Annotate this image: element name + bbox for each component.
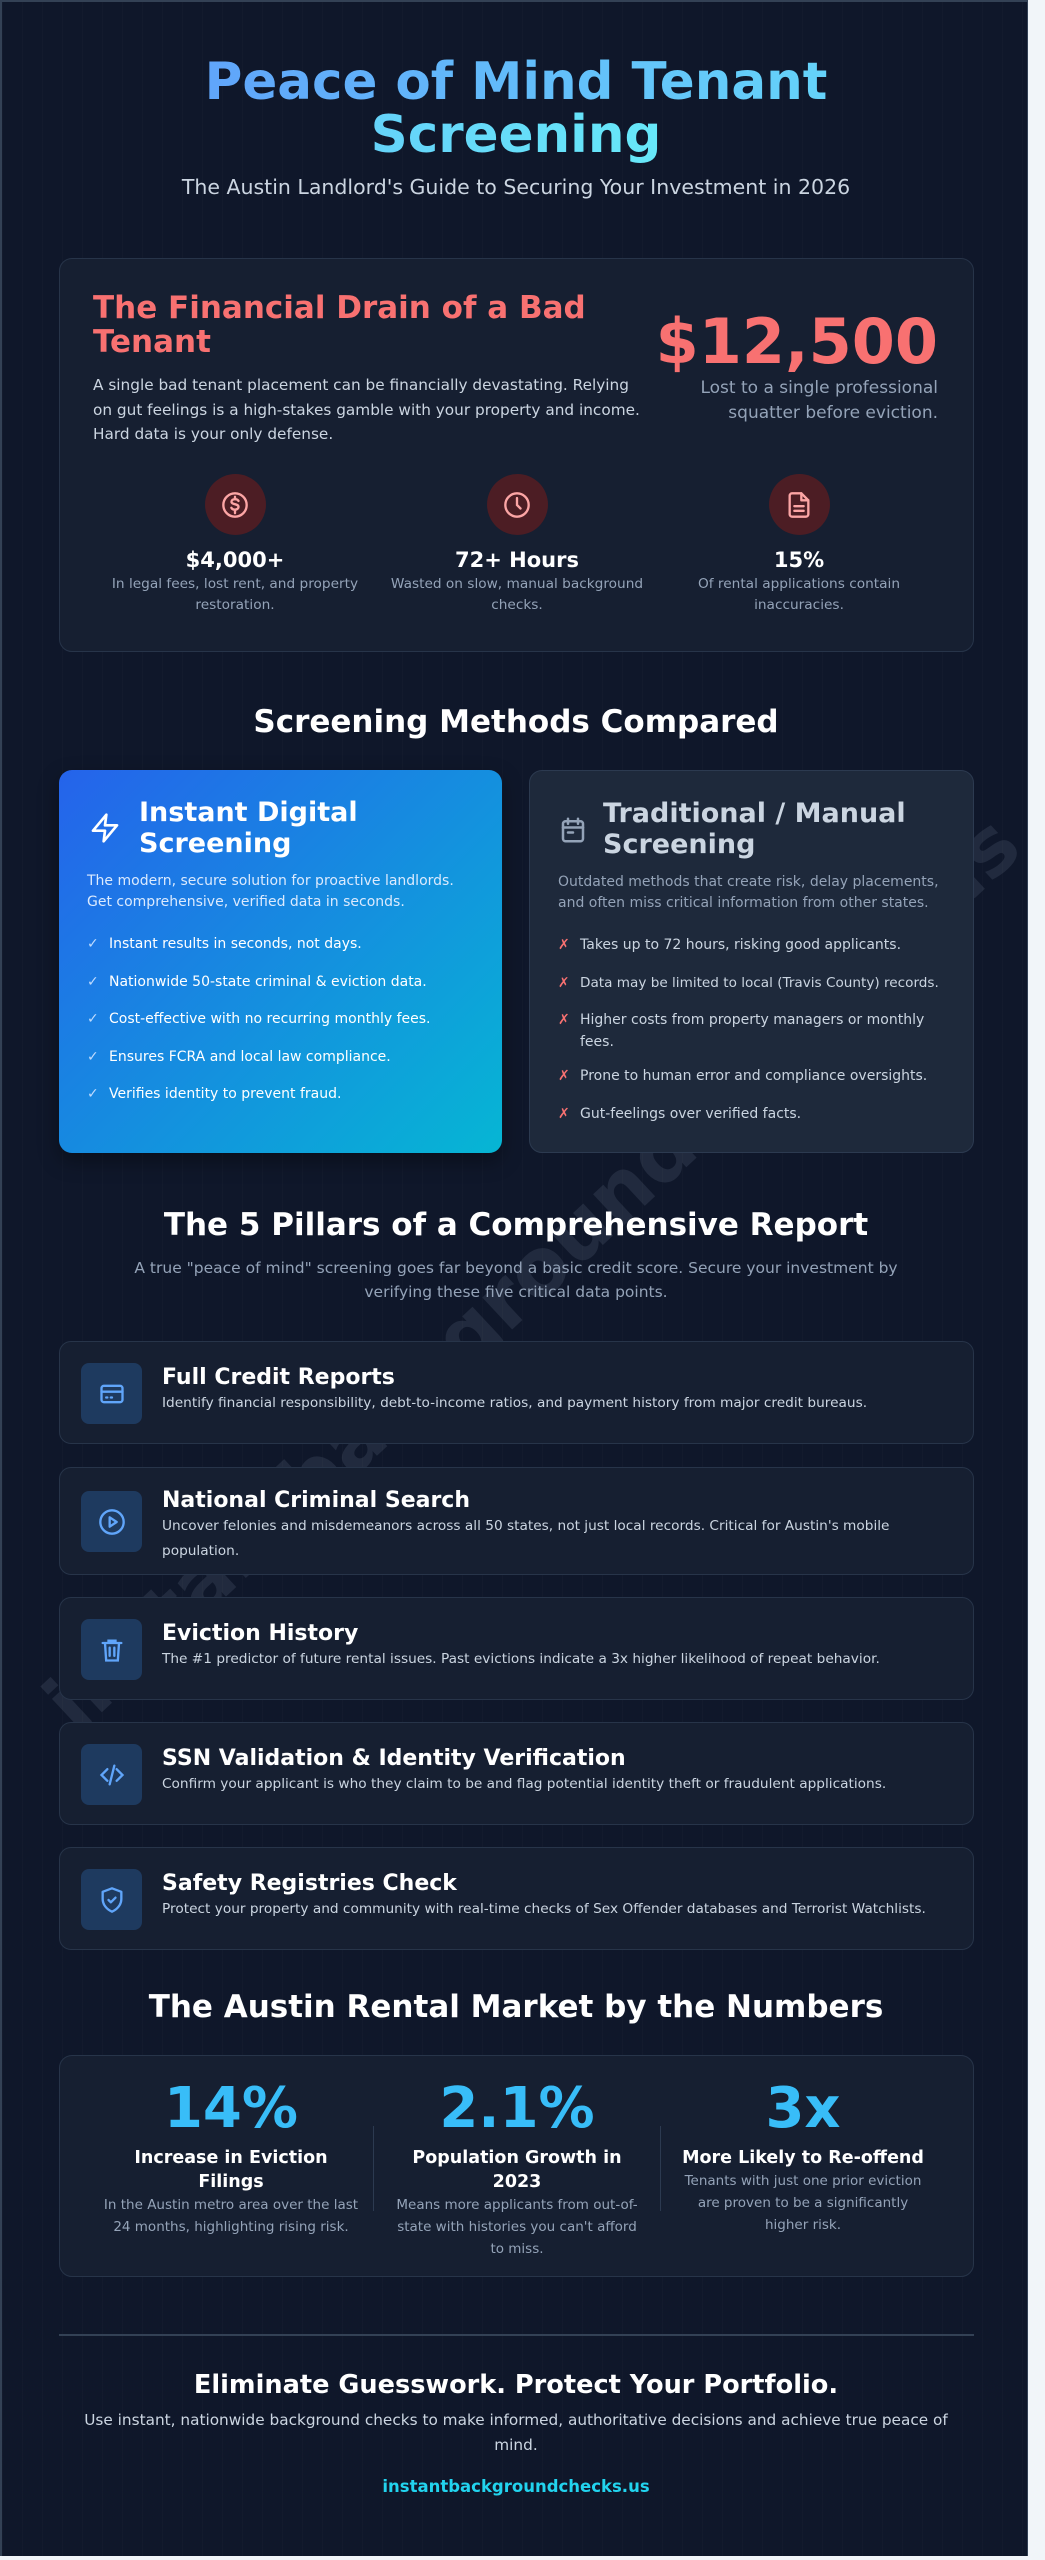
icon: code (81, 1744, 142, 1805)
pillar: criminal (59, 1467, 974, 1575)
big stat: $12,500 (656, 305, 938, 378)
list: ✓ (87, 1049, 99, 1065)
icon: play circle (81, 1491, 142, 1552)
icon: lightning (92, 813, 118, 843)
title: Screening (603, 829, 755, 860)
footer text: Use instant, nationwide background checks to make informed, authoritative decisions and achieve true peace of mind. (84, 2411, 948, 2454)
heading: 5 pillars: The 5 Pillars of a Comprehensive Report (164, 1207, 868, 1243)
title (139, 797, 358, 859)
list: ✗ (558, 937, 570, 953)
stat: 72+ hours: 72+ Hours (455, 548, 579, 572)
list (87, 936, 430, 1102)
subtitle: The Austin Landlord's Guide to Securing Your Investment in 2026 (182, 175, 850, 199)
stat: 3x: Tenants with just one prior eviction are proven to be a significantly higher risk. (685, 2173, 921, 2233)
stat: 15%: Of rental applications contain inaccuracies. (698, 576, 900, 613)
list: ✗ (558, 1068, 570, 1084)
list: Instant results in seconds, not days. (109, 936, 362, 952)
title: Instant Digital (139, 797, 358, 828)
pillar: eviction (59, 1597, 974, 1700)
stat: 72+ hours: Wasted on slow, manual background checks. (391, 576, 643, 613)
pillar: SSN: Confirm your applicant is who they claim to be and flag potential identity theft or fraudulent applications. (162, 1776, 886, 1792)
stat: 14% (104, 2076, 358, 2235)
list: ✗ (558, 1106, 570, 1122)
icon: trash (81, 1619, 142, 1680)
stat: 3x (682, 2076, 924, 2233)
title (205, 52, 827, 165)
heading: Austin numbers: The Austin Rental Market by the Numbers (149, 1989, 883, 2025)
list: ✗ (558, 1012, 570, 1028)
panel: stats (59, 2055, 974, 2277)
icon: dollar (204, 474, 266, 535)
icon: card (81, 1363, 142, 1424)
icon: shield (81, 1869, 142, 1930)
list: ✗ (558, 975, 569, 991)
pillars intro: A true "peace of mind" screening goes far beyond a basic credit score. Secure your investment by verifying these five critical data points. (134, 1259, 898, 1301)
stat: 14%: 14% (164, 2076, 298, 2141)
big stat caption: Lost to a single professional squatter before eviction. (700, 378, 938, 423)
list (558, 937, 939, 1122)
list: Takes up to 72 hours, risking good applicants. (580, 937, 901, 953)
description: The modern, secure solution for proactive landlords. Get comprehensive, verified data in seconds. (87, 873, 454, 910)
stat: $4,000+ (112, 474, 358, 613)
stat: 3x: More Likely to Re-offend (682, 2148, 924, 2168)
pillar: SSN (59, 1722, 974, 1825)
pillar: credit (59, 1341, 974, 1444)
stat: 14%: In the Austin metro area over the last 24 months, highlighting rising risk. (104, 2197, 358, 2235)
stat: 14%: Increase in Eviction Filings (134, 2148, 328, 2192)
title: Screening (139, 828, 291, 859)
pillar: credit: Identify financial responsibility, debt-to-income ratios, and payment history from major credit bureaus. (162, 1395, 867, 1411)
list: Nationwide 50-state criminal & eviction data. (109, 974, 427, 990)
pillar: SSN: SSN Validation & Identity Verification (162, 1746, 626, 1771)
icon: calendar (562, 818, 584, 842)
stat: 15% (698, 474, 900, 613)
list: Prone to human error and compliance oversights. (580, 1068, 927, 1084)
heading: screening methods: Screening Methods Compared (253, 704, 779, 740)
pillar: eviction: Eviction History (162, 1621, 358, 1646)
stat: 2.1%: 2.1% (439, 2076, 595, 2141)
pillar: safety: Protect your property and community with real-time checks of Sex Offender databases and Terrorist Watchlists. (162, 1901, 926, 1917)
stat: 3x: 3x (765, 2076, 841, 2141)
stat: 72+ hours (391, 474, 643, 613)
title: Peace of Mind Tenant (205, 52, 827, 112)
pillar: criminal: Uncover felonies and misdemeanors across all 50 states, not just local records. Critical for Austin's mobile population. (162, 1518, 889, 1559)
list: ✓ (87, 974, 99, 990)
stat: 2.1%: Means more applicants from out-of-state with histories you can't afford to miss. (396, 2197, 638, 2257)
title (603, 798, 906, 860)
pillar: safety (59, 1847, 974, 1950)
divider (660, 2126, 661, 2211)
divider (373, 2126, 374, 2211)
pillar: credit: Full Credit Reports (162, 1365, 395, 1390)
list: Cost-effective with no recurring monthly fees. (109, 1011, 430, 1027)
footer heading: Eliminate Guesswork. Protect Your Portfolio. (194, 2370, 838, 2400)
panel: instant digital (59, 770, 502, 1153)
stat: $4,000+: $4,000+ (186, 548, 284, 572)
heading: The Financial Drain of a Bad Tenant (93, 290, 586, 360)
watermark: instantbackgroundchecks.us (26, 798, 1028, 1749)
stat: 2.1%: Population Growth in 2023 (412, 2148, 622, 2192)
list: ✓ (87, 936, 99, 952)
icon: document (768, 474, 830, 535)
panel: financial drain (59, 258, 974, 652)
panel: traditional manual (529, 770, 974, 1153)
list: Ensures FCRA and local law compliance. (109, 1049, 391, 1065)
icon: clock (486, 474, 548, 535)
pillar: safety: Safety Registries Check (162, 1871, 457, 1896)
list: Gut-feelings over verified facts. (580, 1106, 801, 1122)
list: ✓ (87, 1086, 99, 1102)
pillar: eviction: The #1 predictor of future rental issues. Past evictions indicate a 3x higher likelihood of repeat behavior. (162, 1651, 880, 1667)
list: Verifies identity to prevent fraud. (109, 1086, 341, 1102)
stat: 2.1% (396, 2076, 638, 2257)
footer link: instantbackgroundchecks.us (382, 2477, 650, 2496)
list: Data may be limited to local (Travis County) records. (580, 975, 939, 991)
title: Screening (371, 105, 661, 165)
description: Outdated methods that create risk, delay placements, and often miss critical information from other states. (558, 874, 939, 911)
pillar: criminal: National Criminal Search (162, 1488, 470, 1513)
stat: $4,000+: In legal fees, lost rent, and property restoration. (112, 576, 358, 613)
list: Higher costs from property managers or monthly fees. (580, 1012, 924, 1050)
paragraph: A single bad tenant placement can be financially devastating. Relying on gut feelings is a high-stakes gamble with your property and income. Hard data is your only defense. (93, 376, 640, 443)
stat: 15%: 15% (774, 548, 824, 572)
list: ✓ (87, 1011, 99, 1027)
title: Traditional / Manual (603, 798, 906, 829)
